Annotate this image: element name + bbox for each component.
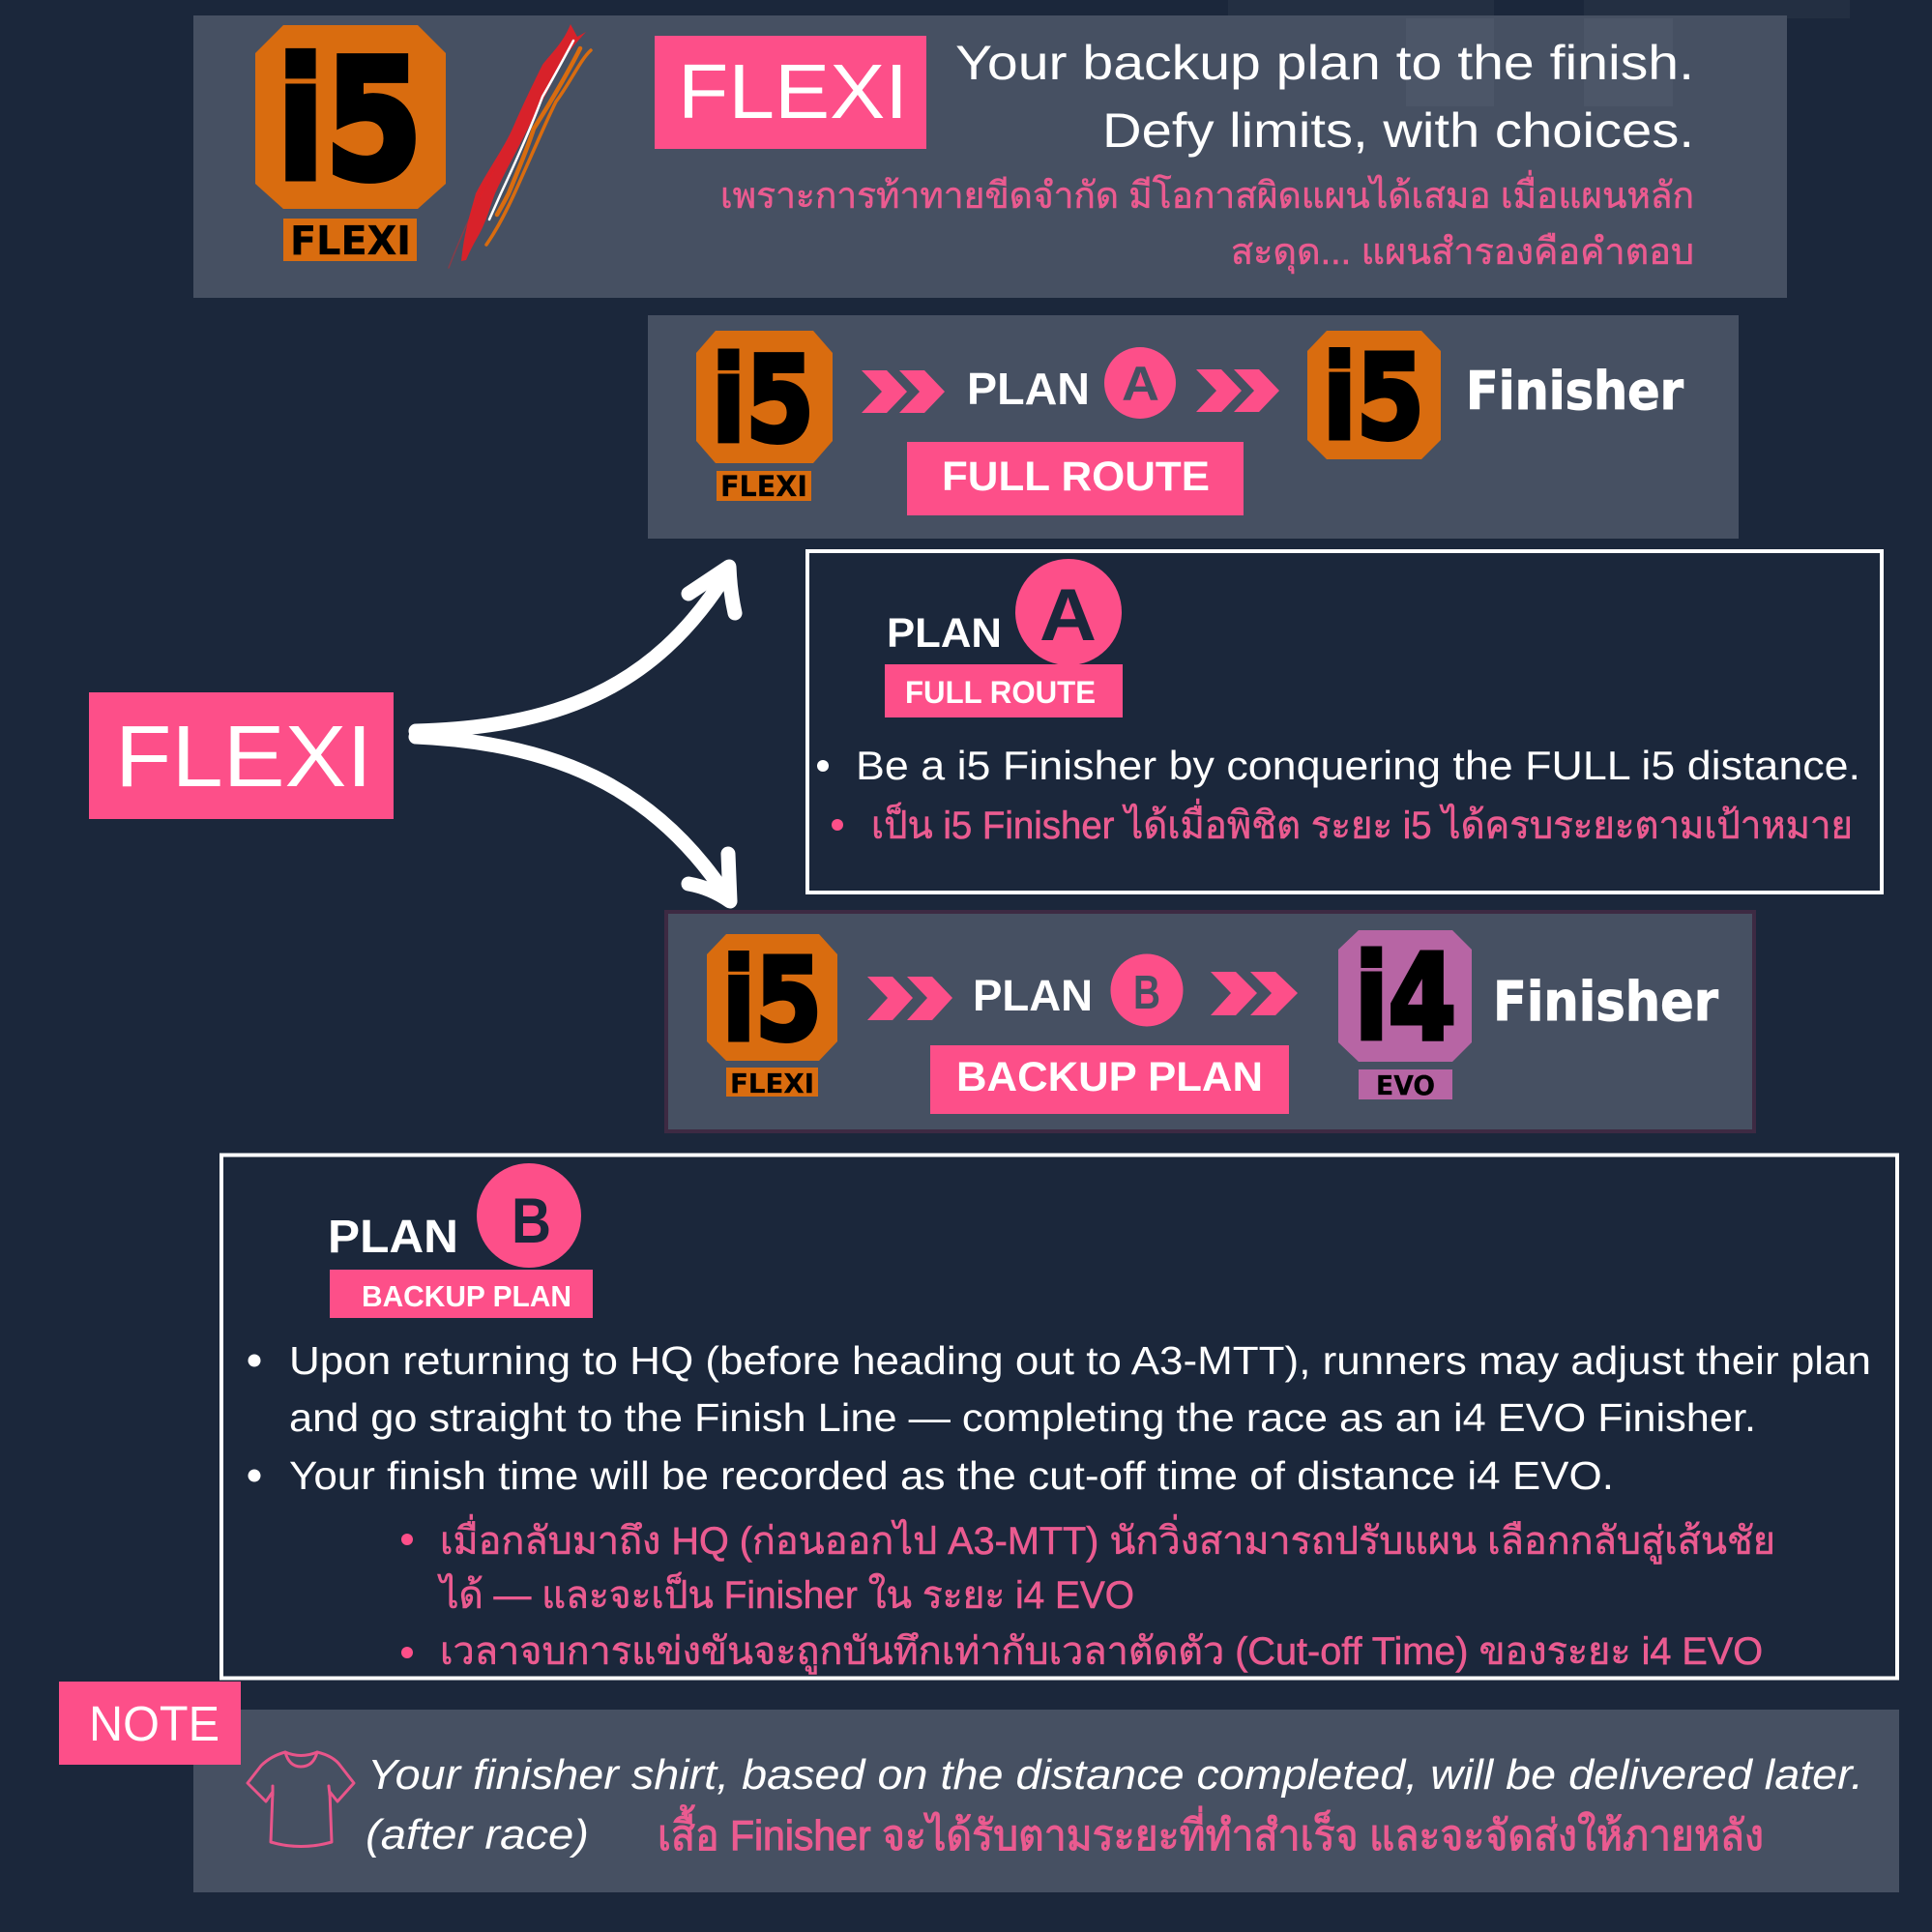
label: PLAN A [967, 347, 1176, 419]
label: PLAN B: PLAN [973, 971, 1093, 1020]
arrow: to plan B [416, 737, 730, 901]
bullet list Thai [401, 1514, 1775, 1674]
panel: plan A details [807, 551, 1882, 893]
icon: double chevron [1211, 972, 1298, 1015]
bullet text Thai: เป็น i5 Finisher ได้เมื่อพิชิต ระยะ i5 ได้ครบระยะตามเป้าหมาย [871, 799, 1853, 847]
icon: i5 FLEXI logo: FLEXI [290, 218, 411, 264]
icon: i5 FLEXI logo: i5 [722, 933, 822, 1067]
panel: plan B details [221, 1155, 1897, 1679]
panel: plan B route [666, 912, 1754, 1131]
icon: i4 EVO logo [1338, 929, 1472, 1101]
label: PLAN A: A [1122, 357, 1159, 411]
heading: PLAN A full route: FULL ROUTE [905, 675, 1096, 710]
icon: i5 FLEXI logo: i5 [712, 332, 814, 469]
badge: FLEXI [655, 36, 926, 149]
tagline English [955, 36, 1694, 158]
badge: BACKUP PLAN: BACKUP PLAN [956, 1054, 1263, 1100]
heading: PLAN A full route [885, 559, 1123, 717]
badge: FULL ROUTE [907, 442, 1244, 515]
badge: FLEXI branch origin [89, 692, 394, 819]
tagline Thai [720, 170, 1694, 274]
icon: double chevron [1196, 369, 1279, 412]
tagline Thai: เพราะการท้าทายขีดจำกัด มีโอกาสผิดแผนได้เสมอ เมื่อแผนหลัก [720, 170, 1694, 217]
bullet list English: and go straight to the Finish Line — completing the race as an i4 EVO Finisher. [289, 1395, 1756, 1440]
bullet text English: Be a i5 Finisher by conquering the FULL i5 distance. [856, 743, 1860, 788]
icon: i4 EVO logo: i4 [1355, 929, 1456, 1067]
icon: t-shirt [248, 1752, 354, 1847]
heading: PLAN B backup plan [328, 1163, 593, 1318]
arrow: to plan A [416, 567, 735, 731]
heading: PLAN B backup plan: PLAN [328, 1212, 458, 1263]
label: Finisher: Finisher [1466, 361, 1683, 422]
icon: i4 EVO logo: EVO [1376, 1069, 1435, 1101]
heading: PLAN B backup plan: BACKUP PLAN [362, 1279, 571, 1313]
icon: i5 FLEXI logo: FLEXI [730, 1068, 814, 1099]
badge: FLEXI branch origin: FLEXI [115, 709, 372, 805]
icon: double chevron [867, 977, 952, 1020]
badge: FULL ROUTE: FULL ROUTE [942, 454, 1210, 500]
note text English: (after race) [366, 1811, 589, 1859]
icon: i5 logo: i5 [1323, 332, 1424, 466]
heading: PLAN A full route: A [1039, 574, 1097, 657]
badge: NOTE [59, 1682, 241, 1765]
heading: PLAN B backup plan: B [512, 1185, 551, 1256]
icon: double chevron [862, 370, 945, 413]
icon: i5 FLEXI logo [707, 933, 837, 1099]
badge: FLEXI: FLEXI [678, 48, 908, 134]
bullet list Thai: เมื่อกลับมาถึง HQ (ก่อนออกไป A3-MTT) นักวิ่งสามารถปรับแผน เลือกกลับสู่เส้นชัย [440, 1514, 1775, 1564]
note text English [366, 1751, 1863, 1859]
bullet list English [248, 1338, 1871, 1498]
badge: BACKUP PLAN [930, 1045, 1289, 1114]
label: PLAN A: PLAN [967, 364, 1090, 414]
tagline Thai: สะดุด... แผนสำรองคือคำตอบ [1231, 232, 1694, 274]
tagline English: Defy limits, with choices. [1102, 103, 1694, 158]
label: Finisher: Finisher [1493, 971, 1718, 1034]
bullet list English: Upon returning to HQ (before heading out to A3-MTT), runners may adjust their plan [289, 1338, 1871, 1383]
label: PLAN B [973, 953, 1184, 1027]
badge: NOTE: NOTE [89, 1696, 220, 1751]
label: PLAN B: B [1133, 967, 1160, 1019]
heading: PLAN A full route: PLAN [887, 610, 1002, 657]
icon: i5 FLEXI logo: FLEXI [720, 470, 807, 503]
panel: header [193, 15, 1787, 298]
icon: i5 FLEXI logo: i5 [277, 23, 423, 218]
icon: brush slash [449, 24, 591, 268]
bullet list Thai: ได้ — และจะเป็น Finisher ใน ระยะ i4 EVO [437, 1571, 1134, 1617]
panel: plan A route [648, 315, 1739, 539]
bullet list Thai: เวลาจบการแข่งขันจะถูกบันทึกเท่ากับเวลาตัดตัว (Cut-off Time) ของระยะ i4 EVO [440, 1630, 1763, 1674]
note text Thai: เสื้อ Finisher จะได้รับตามระยะที่ทำสำเร็จ และจะจัดส่งให้ภายหลัง [658, 1804, 1764, 1859]
note text English: Your finisher shirt, based on the distance completed, will be delivered later. [367, 1751, 1863, 1799]
panel: note [59, 1682, 1899, 1892]
tagline English: Your backup plan to the finish. [955, 36, 1694, 90]
bullet list English: Your finish time will be recorded as the cut-off time of distance i4 EVO. [289, 1453, 1614, 1498]
